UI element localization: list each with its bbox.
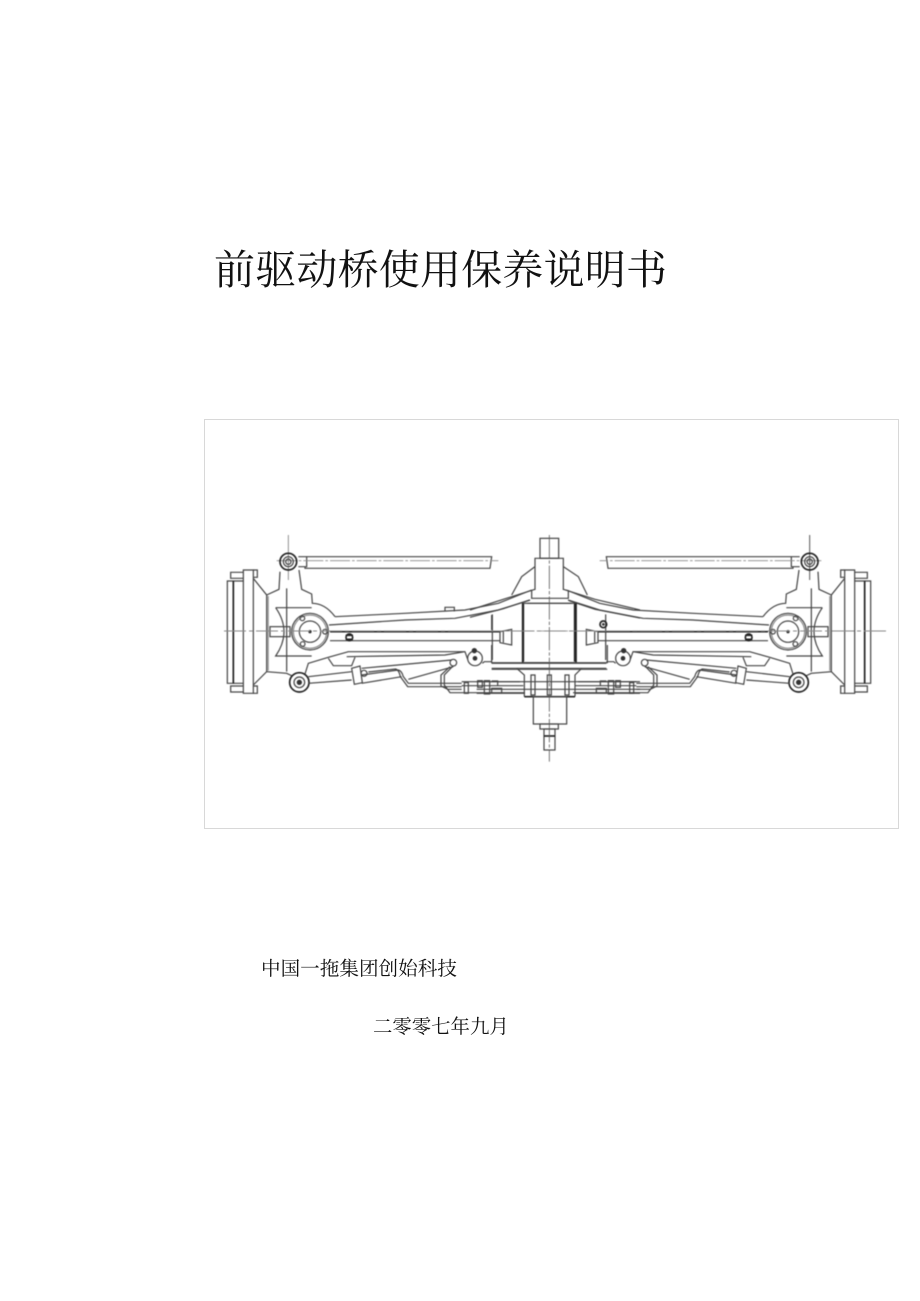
figure panel: front drive axle drawing bbox=[204, 419, 899, 829]
left steering tie rod bbox=[277, 535, 498, 611]
title: 前驱动桥使用保养说明书 bbox=[214, 247, 667, 293]
right steering tie rod bbox=[600, 535, 821, 580]
left half of axle bbox=[227, 535, 549, 694]
central differential housing and pinion bbox=[470, 535, 640, 762]
hub centre lines bbox=[224, 630, 888, 632]
company name: 中国一拖集团创始科技 bbox=[261, 959, 457, 980]
date: 二零零七年九月 bbox=[373, 1017, 509, 1038]
right half of axle bbox=[549, 535, 871, 694]
